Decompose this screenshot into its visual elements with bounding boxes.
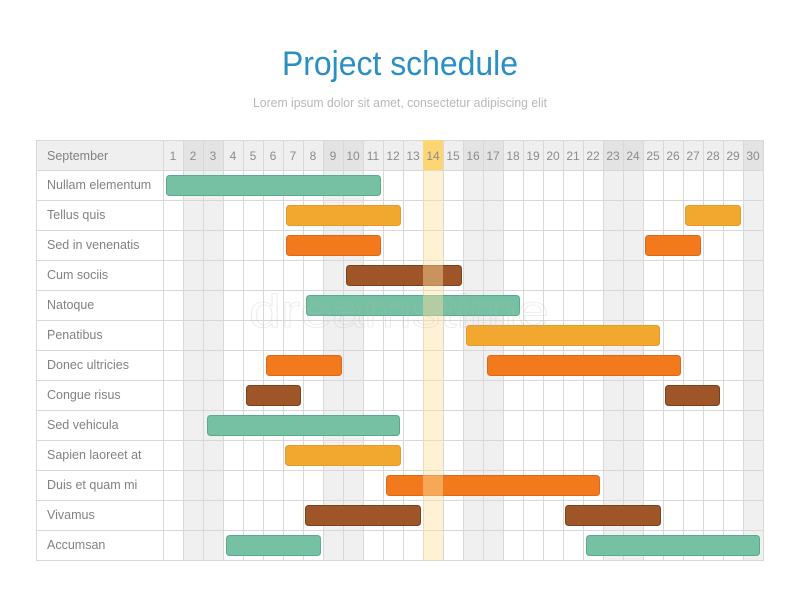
row labels: Natoque	[47, 298, 94, 312]
subtitle: Lorem ipsum dolor sit amet, consectetur adipiscing elit	[253, 96, 548, 110]
day numbers: 1	[170, 149, 177, 163]
day numbers: 26	[666, 149, 680, 163]
day numbers: 13	[406, 149, 420, 163]
row labels: Sed vehicula	[47, 418, 119, 432]
day numbers: 27	[686, 149, 700, 163]
day numbers: 5	[250, 149, 257, 163]
today header cell	[423, 140, 443, 170]
day numbers: 18	[506, 149, 520, 163]
day numbers: 8	[310, 149, 317, 163]
row labels: Sapien laoreet at	[47, 448, 142, 462]
day numbers: 30	[746, 149, 760, 163]
row labels	[47, 178, 151, 552]
day numbers: 4	[230, 149, 237, 163]
day numbers: 23	[606, 149, 620, 163]
weekend column shading	[183, 170, 763, 560]
row labels: Nullam elementum	[47, 178, 151, 192]
title: Project schedule	[282, 45, 518, 83]
weekend header shading	[183, 140, 763, 170]
day numbers: 16	[466, 149, 480, 163]
day numbers: 22	[586, 149, 600, 163]
day numbers: 9	[330, 149, 337, 163]
day numbers: 6	[270, 149, 277, 163]
today header cell: 14	[426, 149, 440, 163]
day numbers: 15	[446, 149, 460, 163]
schedule bars	[166, 176, 760, 556]
day numbers: 17	[486, 149, 500, 163]
row labels: Sed in venenatis	[47, 238, 139, 252]
row labels: Penatibus	[47, 328, 103, 342]
row labels: Accumsan	[47, 538, 105, 552]
day numbers	[170, 149, 760, 163]
day numbers: 25	[646, 149, 660, 163]
day numbers: 19	[526, 149, 540, 163]
row labels: Tellus quis	[47, 208, 105, 222]
row labels: Duis et quam mi	[47, 478, 137, 492]
day numbers: 10	[346, 149, 360, 163]
day numbers: 29	[726, 149, 740, 163]
row labels: Congue risus	[47, 388, 121, 402]
header background	[37, 140, 763, 170]
today column highlight	[423, 170, 443, 560]
day numbers: 24	[626, 149, 640, 163]
day numbers: 12	[386, 149, 400, 163]
day numbers: 2	[190, 149, 197, 163]
day numbers: 3	[210, 149, 217, 163]
day numbers: 21	[566, 149, 580, 163]
day numbers: 7	[290, 149, 297, 163]
row labels: Vivamus	[47, 508, 95, 522]
watermark: dreamstime	[249, 285, 549, 337]
day numbers: 11	[367, 149, 380, 163]
row labels: Donec ultricies	[47, 358, 129, 372]
row labels: Cum sociis	[47, 268, 108, 282]
day numbers: 28	[706, 149, 720, 163]
month label: September	[47, 149, 108, 163]
gantt chart	[36, 140, 764, 561]
day numbers: 20	[546, 149, 560, 163]
